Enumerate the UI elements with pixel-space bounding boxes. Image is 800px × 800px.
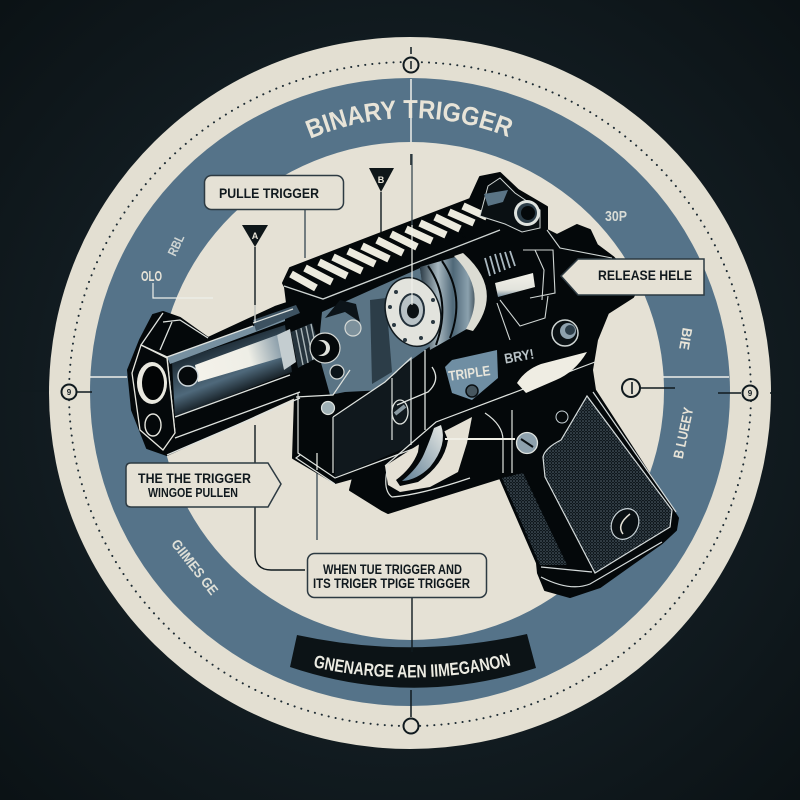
callout explanation: WHEN TUE TRIGGER AND	[323, 562, 462, 577]
callout trigger pulled: WINGOE PULLEN	[148, 485, 238, 500]
slide body shading	[172, 325, 292, 417]
marking BRY: BRY!	[503, 346, 535, 367]
comb spring	[485, 251, 515, 276]
top rail teeth	[291, 206, 487, 288]
rail gap shadows	[316, 232, 465, 296]
trigger guard opening	[385, 417, 472, 492]
bottom banner	[290, 634, 536, 688]
registration marker right	[742, 386, 758, 400]
selector badge	[445, 350, 498, 400]
magazine base plate	[541, 542, 662, 587]
ring label 30P: 30P	[605, 208, 627, 225]
grip pin outline	[556, 411, 568, 423]
bottom banner: GNENARGE AEN IIMEGANON	[314, 653, 510, 678]
grip oval screw	[606, 504, 644, 544]
callout release: RELEASE HELE	[598, 267, 692, 283]
rail lower edge	[284, 230, 500, 299]
upper leader to gear	[411, 154, 413, 225]
callout explanation: ITS TRIGER TPIGE TRIGGER	[313, 576, 470, 591]
rear receiver outlines	[497, 230, 612, 340]
upper rod	[253, 305, 300, 331]
gear	[377, 270, 449, 354]
callout explanation	[308, 554, 486, 598]
callout pull trigger	[204, 176, 344, 210]
grip edge highlight	[593, 392, 676, 512]
grip panel	[543, 396, 672, 573]
marker A: A	[252, 231, 259, 241]
side port	[178, 366, 198, 386]
ring label OLO: OLO	[141, 268, 162, 285]
pistol illustration	[128, 173, 678, 597]
callout trigger pulled	[126, 463, 281, 507]
callout trigger pulled: THE THE TRIGGER	[138, 471, 251, 486]
marker 1	[622, 379, 640, 397]
magazine well	[296, 358, 418, 484]
registration marker left: 9	[67, 388, 72, 397]
selector badge: TRIPLE	[447, 362, 491, 384]
registration marker bottom	[404, 718, 418, 734]
ring label BIE: BIE	[676, 327, 696, 351]
threaded barrel	[291, 323, 322, 368]
marker B	[369, 168, 394, 192]
callout pull trigger: PULLE TRIGGER	[219, 185, 319, 201]
badge screw	[466, 385, 478, 397]
white crescent highlight	[517, 352, 587, 393]
body lower line	[385, 362, 595, 466]
registration marker top	[404, 58, 418, 72]
grip screw	[516, 432, 538, 454]
trigger pin line	[445, 438, 515, 440]
cylinder	[420, 253, 535, 350]
mechanism housing	[318, 268, 432, 395]
slide top band	[167, 315, 285, 364]
marker A	[242, 225, 268, 247]
white leader lines over pistol	[255, 225, 412, 470]
spring wire	[392, 350, 436, 430]
blue ring	[90, 78, 730, 706]
barrel highlight	[195, 335, 283, 382]
ring label OLO	[141, 268, 213, 298]
front strap texture	[502, 473, 567, 565]
callout release	[561, 259, 704, 295]
ring label lower left: GIIMES GE	[168, 536, 222, 598]
mechanism detail	[310, 298, 392, 384]
ring label RBL: RBL	[164, 232, 187, 258]
pistol silhouette	[128, 173, 678, 597]
guard edge highlights	[386, 410, 512, 497]
registration marker right: 9	[748, 389, 753, 398]
inner cream disc	[158, 142, 664, 640]
registration marker left	[62, 384, 76, 400]
slide edge highlights	[141, 313, 300, 455]
trigger	[396, 423, 448, 486]
upper right screw	[552, 320, 578, 346]
barrel collar	[277, 329, 296, 370]
leader lines behind pistol	[255, 192, 412, 652]
muzzle face	[132, 345, 175, 450]
marker B: B	[378, 175, 385, 185]
title: BINARY TRIGGER	[305, 100, 512, 138]
ring label BLUEEY: B LUEEY	[670, 405, 696, 460]
rear sight	[480, 178, 540, 232]
dotted ring	[69, 62, 751, 726]
